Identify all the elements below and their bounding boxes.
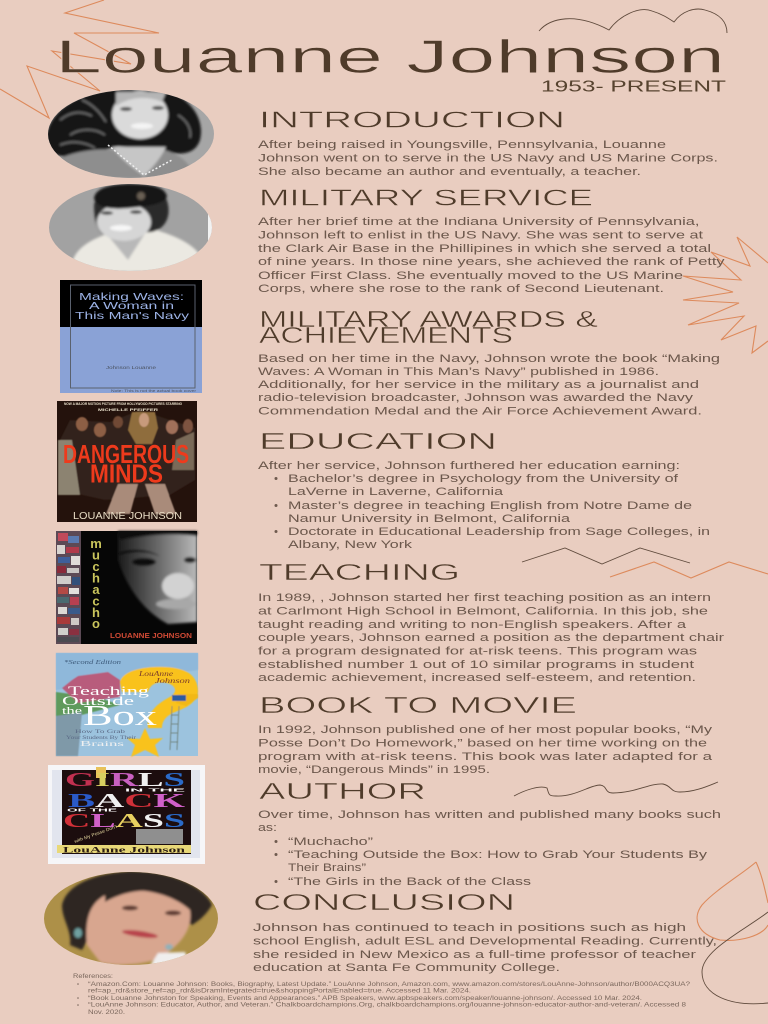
photo: Louanne in navy uniform [49,184,212,272]
text block: author: as: [258,822,277,834]
book cover: Making Waves: Making Waves: [79,291,184,303]
decoration: orange zigzag [610,562,768,578]
book cover: Dangerous Minds: LOUANNE JOHNSON [73,510,182,522]
photo: young Louanne portrait [46,89,214,178]
heading: introduction: INTRODUCTION [259,106,565,132]
book cover: Dangerous Minds: MICHELLE PFEIFFER [98,407,158,412]
section: book to movie [258,692,713,776]
text block: book to movie [258,724,713,776]
text block: conclusion: she resided in New Mexico as a full-time professor of teacher [253,949,696,961]
decoration: wavy line [514,782,718,796]
heading: military service: MILITARY SERVICE [259,184,593,210]
book cover: Teaching Outside the Box: Your Students By Their [66,735,136,741]
section: military awards and achievements [258,306,720,418]
references: References: [73,973,113,980]
text block: author: “The Girls in the Back of the Class [288,876,532,888]
text block: military service: the Clark Air Base in the Phillipines in which she served a total [258,243,711,255]
book cover: Muchacho: LOUANNE JOHNSON [110,633,192,640]
book cover: Teaching Outside the Box: Brains [80,740,125,748]
text block: teaching: taught reading and writing to non-English speakers. After a [258,619,687,631]
section: author [258,778,721,888]
book cover: Making Waves: Note: This is not the actual book cover [111,388,197,393]
book cover: Teaching Outside the Box: How To Grab [75,729,125,735]
text block: author: “Muchacho” [288,836,373,848]
text block: teaching [258,592,724,684]
section: education [258,428,710,551]
references: “LouAnne Johnson: Educator, Author, and Veteran.” Chalkboardchampions.Org, chalkboardchampions.org/louanne-johnson-educator-author-and-veteran/. Accessed 8 [88,1002,687,1008]
text block: author: Over time, Johnson has written and published many books such [258,809,721,821]
heading: author: AUTHOR [259,778,426,804]
references: Nov. 2020. [88,1009,125,1016]
decoration: brown loop line top right [539,9,727,33]
book cover: Dangerous Minds: DANGEROUS [63,439,189,469]
text block: education [258,460,710,551]
text block: book to movie: In 1992, Johnson published one of her most popular books, “My [258,724,713,736]
text block: teaching: established number 1 out of 10 similar programs in student [258,659,695,671]
references [73,973,691,1016]
text block: author [258,809,721,888]
book cover: Muchacho: h [92,570,100,586]
photo: older Louanne portrait [44,871,218,966]
book cover: Muchacho: h [92,605,100,620]
book cover: Girls in the Back of the Class [48,765,205,864]
references: “Amazon.Com: Louanne Johnson: Books, Biography, Latest Update.” LouAnne Johnson, Amazon.com, www.amazon.com/stores/LouAnne-Johnson/author/B000ACQ3UA? [88,981,691,988]
heading: military awards and achievements: MILITARY AWARDS & [259,306,598,332]
heading: military awards and achievements: ACHIEVEMENTS [259,322,513,348]
decoration: orange zigzag top left [0,0,159,118]
text block: military awards: Waves: A Woman in This Man’s Navy” published in 1986. [258,366,659,378]
text block: teaching: In 1989, , Johnson started her first teaching position as an intern [258,592,711,604]
text block: teaching: academic achievement, increased self-esteem, and retention. [258,672,696,684]
text block: military awards [258,353,720,418]
book cover: Muchacho: a [92,582,100,597]
section: conclusion [253,889,717,974]
book cover: Girls in the Back of the Class: OF THE [67,808,117,812]
book cover: Teaching Outside the Box: Teaching [68,683,150,698]
book cover: Girls in the Back of the Class: LouAnne Johnson [63,846,186,854]
text block: book to movie: movie, “Dangerous Minds” in 1995. [258,764,490,776]
text block: conclusion [253,922,717,974]
references: “Book Louanne Johnston for Speaking, Events and Appearances.” APB Speakers, www.apbspeakers.com/speaker/louanne-johnson/. Accessed 10 Mar. 2024. [88,995,642,1002]
book cover: Girls in the Back of the Class: C L A S S [63,810,185,832]
heading: book to movie: BOOK TO MOVIE [259,692,577,718]
book cover: Teaching Outside the Box: Box [83,700,158,732]
text block: military service: Officer First Class. She eventually moved to the US Marine [258,270,683,282]
text block: military awards: radio-television broadcaster, Johnson was awarded the Navy [258,392,694,404]
references: ref=ap_rdr&store_ref=ap_rdr&isDramIntegrated=true&shoppingPortalEnabled=true. Accessed 11 Mar. 2024. [88,988,471,994]
text block: introduction: Johnson went on to serve in the US Navy and US Marine Corps. [258,152,718,164]
heading: conclusion: CONCLUSION [253,889,515,915]
text block: introduction [258,139,718,178]
text block: author: “Teaching Outside the Box: How to Grab Your Students By [288,849,708,861]
book cover: Muchacho: c [92,594,100,608]
book cover: Making Waves: Johnson Louanne [106,365,157,370]
decoration: brown zigzag [522,548,690,564]
book cover: Making Waves: This Man's Navy [75,310,190,322]
text block: introduction: After being raised in Youngsville, Pennsylvania, Louanne [258,139,666,151]
text block: military service: Johnson left to enlist in the US Navy. She was sent to serve at [258,230,704,242]
text block: book to movie: program with at-risk teens. This book was later adapted for a [258,751,713,763]
book cover: Dangerous Minds: MINDS [90,458,163,488]
title: Louanne Johnson [55,30,725,82]
book cover: Teaching Outside the Box: LouAnne [138,670,173,678]
text block: education: Master’s degree in teaching English from Notre Dame de [288,500,692,512]
book cover: Dangerous Minds: NOW A MAJOR MOTION PICTURE FROM HOLLYWOOD PICTURES STARRING [64,402,182,406]
text block: military awards: Commendation Medal and the Air Force Achievement Award. [258,406,702,418]
text block: education: Namur University in Belmont, California [288,513,571,525]
book cover: Muchacho [56,531,197,644]
book cover: Muchacho: m [90,536,102,551]
text block: conclusion: school English, adult ESL and Developmental Reading. Currently, [253,936,717,948]
book cover: Muchacho: u [92,548,100,562]
book cover: Teaching Outside the Box: the [62,706,83,717]
text block: military service: After her brief time at the Indiana University of Pennsylvania, [258,216,700,228]
book cover: Teaching Outside the Box: Johnson [155,677,191,685]
text block: military service [258,216,725,295]
book cover: Girls in the Back of the Class: B A C K [68,790,186,812]
book cover: Girls in the Back of the Class: IN THE [125,788,185,792]
text block: conclusion: Johnson has continued to teach in positions such as high [253,922,686,934]
decoration: brown drop outline [702,912,768,1004]
text block: introduction: She also became an author and eventually, a teacher. [258,166,641,178]
decoration: orange drop outline [697,862,768,940]
text block: education: LaVerne in Laverne, California [288,486,504,498]
book cover: Making Waves: A Woman in [89,300,174,312]
section: military service [258,184,725,295]
text block: education: Doctorate in Educational Leadership from Sage Colleges, in [288,526,710,538]
text block: education: Bachelor’s degree in Psychology from the University of [288,473,679,485]
text block: teaching: for a program designated for at-risk teens. This program was [258,646,698,658]
book cover: Muchacho: c [92,559,100,574]
text block: conclusion: education at Santa Fe Community College. [253,962,560,974]
text block: teaching: at Carlmont High School in Belmont, California. In this job, she [258,606,708,618]
book cover: Girls in the Back of the Class: G I R L S [65,769,185,791]
dates: 1953- PRESENT [541,78,727,96]
text block: teaching: couple years, Johnson earned a position as the department chair [258,632,724,644]
text block: military awards: Additionally, for her service in the military as a journalist and [258,379,699,391]
heading: education: EDUCATION [259,428,497,454]
book cover: Teaching Outside the Box [56,653,198,757]
decoration: orange starburst right [683,237,768,353]
text block: book to movie: Posse Don’t Do Homework,” based on her time working on the [258,738,707,750]
text block: education: Albany, New York [288,539,413,551]
book cover: Girls in the Back of the Class: with My Posse Don't [74,824,118,844]
heading: military awards and achievements [259,306,598,348]
text block: military service: Corps, where she rose to the rank of Second Lieutenant. [258,283,664,295]
text block: education: After her service, Johnson furthered her education earning: [258,460,680,472]
text block: author: Their Brains” [288,862,366,874]
book cover: Making Waves [60,280,202,393]
text block: military awards: Based on her time in the Navy, Johnson wrote the book “Making [258,353,720,365]
book cover: Teaching Outside the Box: Outside [62,693,134,708]
book cover: Dangerous Minds [57,401,197,522]
heading: teaching: TEACHING [259,559,460,585]
book cover: Muchacho: o [92,616,100,631]
section: teaching [258,559,724,684]
book cover: Teaching Outside the Box: *Second Edition [64,660,121,666]
section: introduction [258,106,718,178]
text block: military service: of nine years. In those nine years, she achieved the rank of Petty [258,256,725,268]
